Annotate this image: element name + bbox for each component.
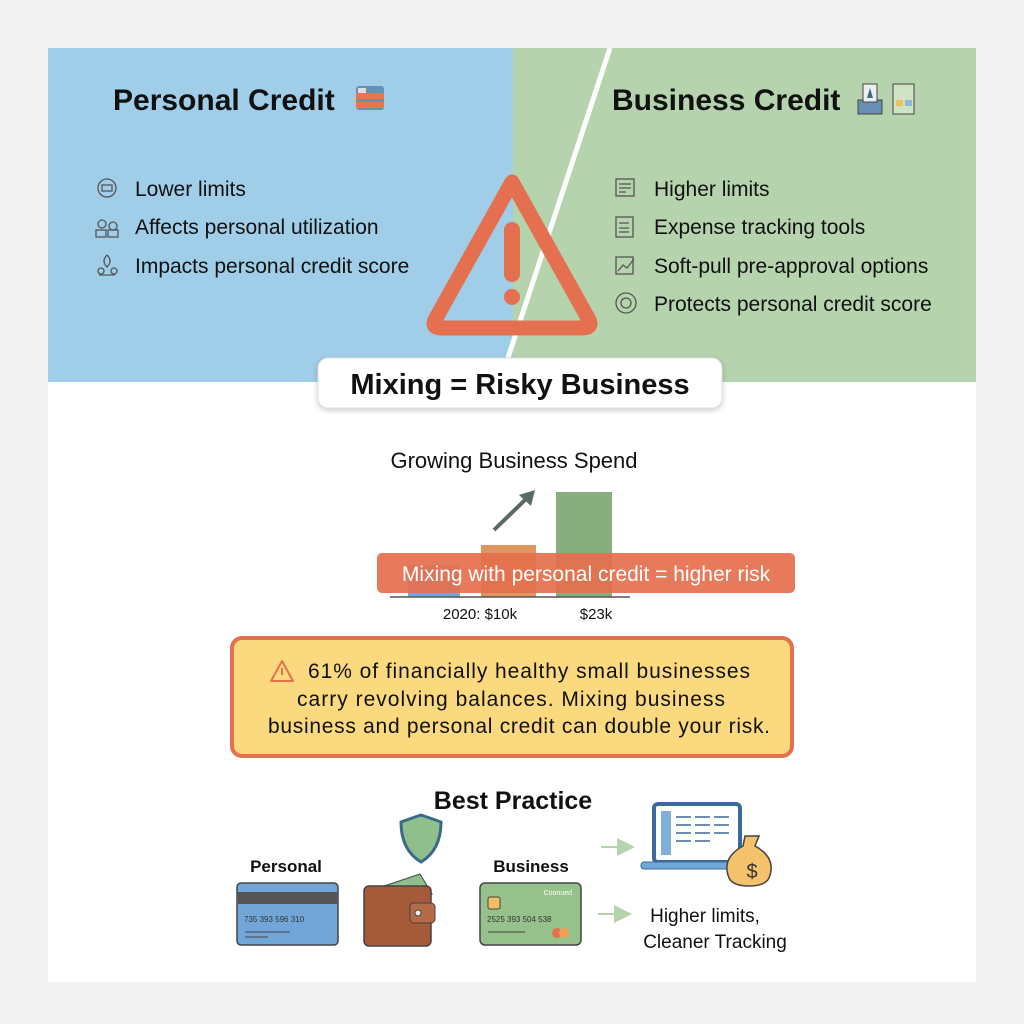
banner: higher risk [377,553,795,593]
arrow: to result [598,905,632,923]
callout: statistic warning: carry revolving balances. Mixing business [297,688,725,711]
icon: shield [401,815,441,862]
list: business [616,178,932,316]
panel: personal credit [48,48,514,382]
label: business: Business [493,857,569,876]
heading: business credit: Business Credit [612,84,840,117]
heading: personal credit: Personal Credit [113,84,335,117]
banner: higher risk: Mixing with personal credit = higher risk [402,563,771,586]
list: personal: Lower limits [135,178,246,201]
chart: growing business spend: $23k [580,606,613,623]
list: personal: Impacts personal credit score [135,255,409,278]
list: business: Soft-pull pre-approval options [654,255,928,278]
icon: flag [356,86,384,110]
icon: small warning [271,661,293,681]
callout: statistic warning: 61% of financially healthy small businesses [308,660,750,683]
list: business: Protects personal credit score [654,293,932,316]
callout: mixing risky business: Mixing = Risky Business [350,369,690,401]
icon: laptop with money bag: $ [746,861,758,883]
callout: statistic warning: business and personal credit can double your risk. [268,715,770,738]
arrow: growth [494,490,535,530]
icon: laptop with money bag [641,804,771,886]
panel: business credit [513,48,976,382]
list: personal: Affects personal utilization [135,216,379,239]
label: personal: Personal [250,857,322,876]
list: business: Expense tracking tools [654,216,865,239]
divider diagonal [500,48,610,382]
list: business: Higher limits [654,178,770,201]
callout: statistic warning [232,638,792,756]
icon: personal card: 735 393 596 310 [244,915,305,924]
icon: building [858,84,914,114]
text: result: Cleaner Tracking [643,932,787,953]
icon: personal card [237,883,338,945]
callout: mixing risky business [318,358,722,408]
icon: warning triangle [434,182,590,328]
text: result [643,906,787,953]
icon: business card [480,883,581,945]
heading: best practice: Best Practice [434,787,592,815]
arrow: to laptop [601,838,635,856]
list: personal [96,178,409,278]
chart title: Growing Business Spend [390,448,638,473]
text: result: Higher limits, [650,906,760,927]
chart: growing business spend: 2020: $10k [443,606,518,623]
icon: business card: 2525 393 504 538 [487,915,552,924]
chart: growing business spend [377,448,795,623]
icon: business card: Coonued [544,890,572,897]
icon: wallet [364,874,435,946]
